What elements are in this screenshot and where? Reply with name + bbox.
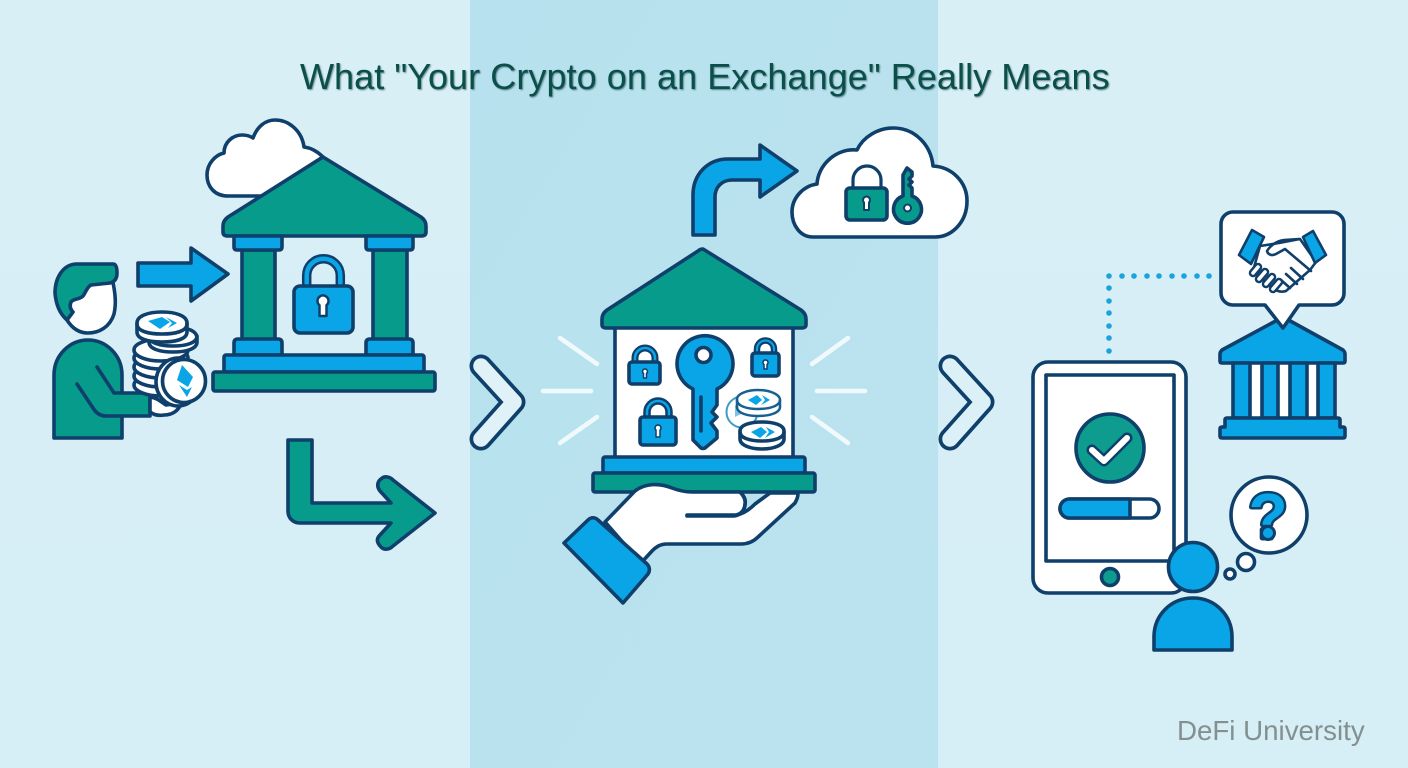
question mark: ? (1248, 480, 1288, 552)
panel: right background (938, 0, 1408, 768)
padlock top right (752, 340, 779, 376)
question mark dot (1262, 526, 1274, 540)
bank capitals (234, 236, 413, 250)
chevron: centre to right (950, 366, 983, 439)
bank blue step (224, 355, 424, 372)
icon: handshake (1239, 230, 1326, 292)
cloud key (894, 168, 921, 223)
coins in vault (726, 390, 784, 449)
bank right column (373, 250, 407, 340)
hand finger line (687, 493, 745, 516)
person shoulders (1154, 598, 1232, 650)
vault roof (602, 249, 806, 328)
vault walls (615, 326, 793, 458)
person hair (55, 264, 117, 320)
small bank roof (1220, 317, 1345, 363)
thought bubble medium (1238, 554, 1254, 570)
speech bubble (1221, 212, 1344, 328)
rays: glow around vault (543, 338, 865, 443)
arrow: blue into exchange (138, 248, 228, 301)
person arm lines (77, 367, 122, 416)
padlock (294, 259, 353, 333)
arrow: green L-shaped arrow (288, 440, 435, 549)
person face (67, 278, 115, 333)
arrow: blue curved up to cloud (693, 145, 797, 235)
small bank base (1220, 418, 1345, 438)
title: What "Your Crypto on an Exchange" Really Means (300, 56, 1110, 97)
person body (54, 340, 150, 438)
icon: cloud with lock and key (792, 128, 967, 237)
icon: vault building with keys and coins (593, 249, 815, 492)
bank green step (213, 372, 435, 391)
cloud outline (792, 128, 967, 237)
padlock top left (629, 348, 660, 384)
icon: open hand holding vault (564, 485, 798, 603)
large ethereum coin (156, 358, 206, 406)
hand palm (605, 485, 798, 563)
connector: dotted line tablet to bank (1106, 273, 1212, 354)
icon: person with question (1154, 477, 1307, 650)
progress bar (1060, 499, 1159, 518)
coin stack (134, 312, 197, 396)
icon: exchange bank with lock (213, 157, 435, 391)
vault blue step (603, 457, 805, 473)
tablet screen (1046, 375, 1174, 561)
panel: centre background (470, 0, 938, 768)
thought bubble small (1225, 569, 1235, 579)
bank roof (223, 157, 426, 236)
padlock bottom left (640, 401, 676, 445)
panel: left background (0, 0, 470, 768)
tablet body (1033, 362, 1186, 593)
small bank columns (1233, 363, 1335, 418)
white gaps behind columns (1233, 363, 1335, 418)
home button (1102, 568, 1118, 586)
large key (677, 336, 733, 448)
icon: small blue bank (1220, 317, 1345, 438)
watermark: DeFi University (1177, 715, 1365, 746)
chevron: left to centre (481, 366, 514, 439)
thought bubble large (1231, 477, 1307, 553)
vault green step (593, 473, 815, 492)
hand under coins (150, 397, 181, 415)
icon: tablet with progress (1033, 362, 1186, 593)
icon: cloud behind exchange (207, 120, 323, 196)
check badge (1076, 414, 1144, 482)
person head (1168, 542, 1218, 592)
bank column bases (234, 339, 413, 355)
icon: person holding coins (54, 264, 206, 438)
hand cuff (564, 518, 649, 603)
cloud padlock (846, 166, 887, 220)
callout: speech bubble with handshake (1221, 212, 1344, 328)
bank left column (242, 250, 275, 340)
